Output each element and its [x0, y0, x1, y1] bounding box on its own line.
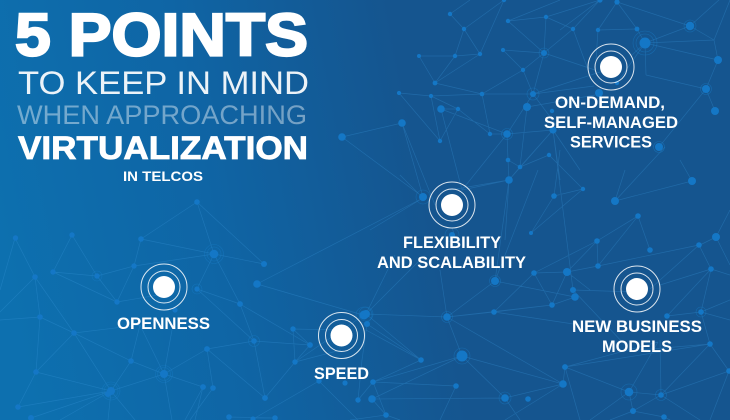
point: on-demand, self-managed services	[544, 44, 678, 152]
label	[544, 94, 678, 152]
point: speed	[314, 312, 369, 383]
icon: target marker	[614, 266, 660, 312]
label	[377, 234, 526, 272]
label: AND SCALABILITY	[377, 254, 526, 272]
point: flexibility and scalability	[377, 182, 526, 272]
label: SERVICES	[570, 134, 652, 152]
label: OPENNESS	[117, 315, 210, 333]
label: SPEED	[314, 365, 369, 383]
icon: target marker	[429, 182, 475, 228]
heading: 5 POINTS: 5 POINTS	[15, 2, 308, 68]
point: new business models	[572, 266, 702, 356]
heading: when approaching: WHEN APPROACHING	[17, 100, 307, 130]
label: FLEXIBILITY	[403, 234, 501, 252]
icon: target marker	[141, 264, 187, 310]
heading: virtualization: VIRTUALIZATION	[18, 130, 308, 166]
icon: target marker	[588, 44, 634, 90]
heading: to keep in mind: TO KEEP IN MIND	[18, 65, 309, 101]
label: MODELS	[602, 338, 672, 356]
label: NEW BUSINESS	[572, 318, 702, 336]
point: openness	[117, 264, 210, 333]
label	[572, 318, 702, 356]
label: SELF-MANAGED	[544, 114, 678, 132]
icon: target marker	[318, 312, 364, 358]
heading: in telcos: IN TELCOS	[123, 168, 203, 184]
title	[15, 2, 309, 184]
label: ON-DEMAND,	[555, 94, 665, 112]
